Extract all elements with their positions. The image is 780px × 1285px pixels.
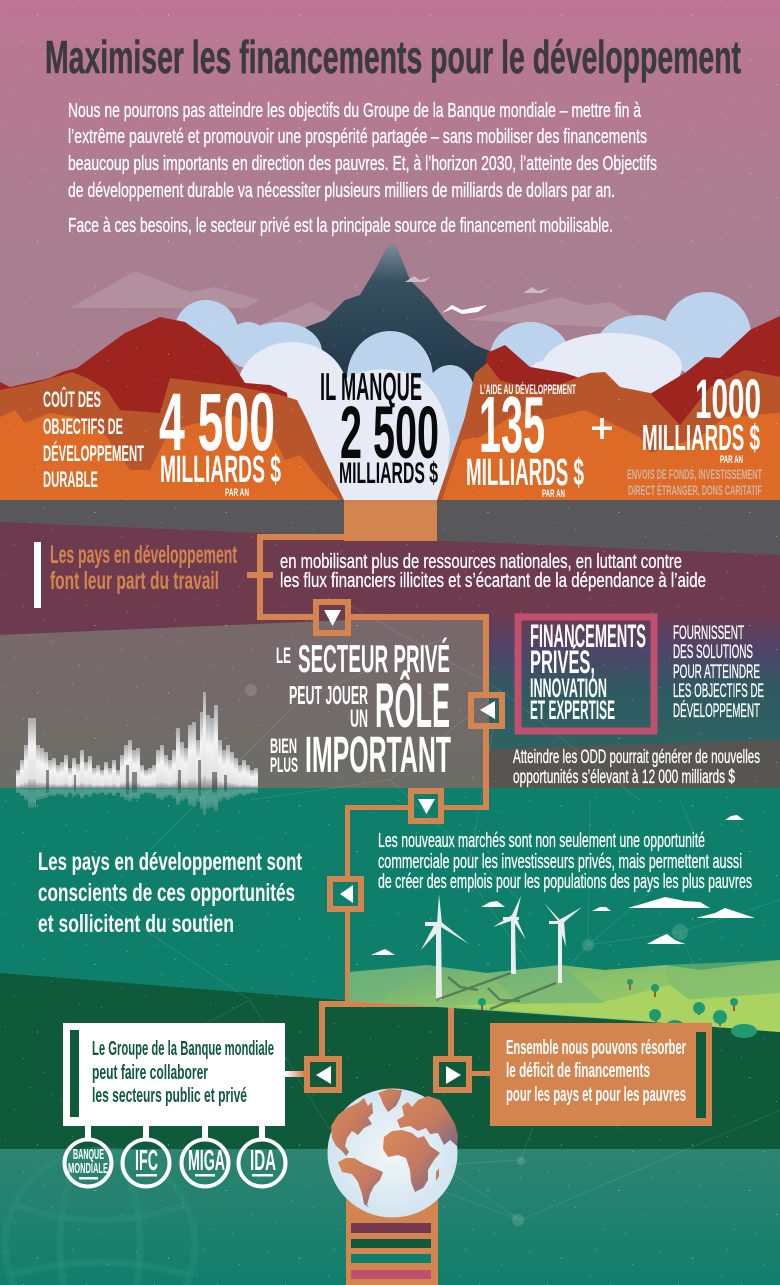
private sector headline: PLUS	[270, 754, 298, 777]
badge: Banque mondiale: BANQUE	[73, 1146, 104, 1163]
world bank logo watermark	[5, 1150, 195, 1285]
dark central peak	[306, 243, 492, 420]
flow connector lines	[247, 500, 490, 1076]
stat: cost of SDGs: PAR AN	[225, 487, 249, 499]
badge rings	[64, 1140, 286, 1186]
wind turbines	[421, 894, 582, 1000]
badge: IDA	[250, 1145, 276, 1177]
private sector headline: BIEN	[270, 735, 297, 758]
badge: Banque mondiale: MONDIALE	[68, 1160, 108, 1177]
arrow: down 1	[316, 602, 348, 633]
pink box: private finance: INNOVATION	[530, 673, 607, 703]
text: IMPORTANT	[305, 726, 451, 783]
developing countries aware statement: Les pays en développement sont	[38, 848, 302, 876]
stat: development aid	[466, 380, 584, 500]
mid orange mountains	[0, 363, 780, 500]
intro text	[68, 100, 657, 237]
stat: development aid: L’AIDE AU DÉVELOPPEMENT	[480, 381, 576, 397]
pink box: private finance	[518, 617, 654, 731]
developing countries aware statement: conscients de ces opportunités	[38, 879, 295, 907]
developing countries aware statement: et sollicitent du soutien	[38, 910, 234, 938]
white box: World Bank Group: peut faire collaborer	[92, 1062, 208, 1084]
white box: World Bank Group: les secteurs public et privé	[92, 1085, 247, 1107]
badge: IFC	[135, 1145, 158, 1177]
trees	[478, 979, 757, 1038]
mountain landscape	[0, 243, 780, 500]
stat: development aid: 135	[479, 380, 545, 469]
stat: cost of SDGs: DÉVELOPPEMENT	[43, 441, 144, 466]
background: pink sky	[0, 0, 780, 502]
wind farm landscape	[349, 815, 780, 1038]
network nodes	[245, 684, 688, 1226]
solutions text	[673, 623, 764, 722]
background: dark green section	[0, 973, 780, 1150]
stat: other flows	[627, 367, 762, 498]
developing countries aware statement	[38, 848, 302, 938]
text: SECTEUR PRIVÉ	[298, 637, 450, 681]
pink box: private finance: PRIVÉS,	[530, 644, 595, 680]
opportunities text	[513, 747, 760, 788]
domestic resources text	[280, 551, 706, 592]
birds	[405, 276, 549, 314]
city skyline	[16, 692, 258, 788]
badge: Banque mondiale	[68, 1146, 108, 1180]
institution badges	[64, 1126, 286, 1186]
background: gray panel	[0, 614, 490, 788]
text: RÔLE	[375, 670, 450, 741]
stat: cost of SDGs: OBJECTIFS DE	[43, 414, 123, 439]
stem under globe	[346, 1195, 438, 1285]
orange box: together: le déficit de financements	[506, 1060, 650, 1082]
plus sign	[592, 418, 612, 439]
pale clouds	[237, 333, 682, 500]
stat: cost of SDGs	[43, 377, 281, 499]
white box: World Bank Group: Le Groupe de la Banque mondiale	[92, 1038, 274, 1060]
arrow: right 6	[436, 1059, 469, 1090]
institution badges: MIGA	[188, 1145, 225, 1177]
stat: other flows: PAR AN	[720, 454, 743, 466]
hill facets	[349, 960, 780, 1032]
developing countries statement	[34, 541, 237, 608]
stat: development aid: PAR AN	[542, 488, 565, 500]
connector white box to arrow	[285, 1071, 304, 1077]
developing countries statement: font leur part du travail	[50, 567, 219, 595]
badge: MIGA	[188, 1145, 225, 1177]
private sector headline: PEUT JOUER	[289, 680, 368, 710]
text: MILLIARDS $	[466, 452, 584, 494]
private sector headline: UN	[350, 705, 368, 733]
stat: cost of SDGs: DURABLE	[43, 467, 98, 492]
globe	[328, 1088, 458, 1218]
network lines background	[60, 600, 780, 1220]
stat: cost of SDGs: MILLIARDS $	[160, 449, 281, 491]
stat: the gap: MILLIARDS $	[339, 457, 438, 490]
new markets text	[378, 830, 752, 893]
private sector headline	[270, 637, 451, 783]
badge: IDA: IDA	[250, 1145, 276, 1177]
stat: the gap: 2 500	[340, 391, 439, 474]
arrow: left 4	[330, 879, 361, 909]
background: gray band	[0, 500, 780, 570]
developing countries statement: Les pays en développement	[50, 541, 237, 569]
dark red mountains	[0, 316, 780, 500]
stat: cost of SDGs: COÛT DES	[43, 387, 101, 412]
background: maroon band	[0, 522, 780, 640]
turbine shadows	[436, 973, 556, 1009]
far pale mountains	[70, 271, 660, 330]
background: teal section	[0, 788, 780, 1048]
arrow: down 3	[411, 791, 441, 821]
stat: cost of SDGs: 4 500	[159, 377, 275, 468]
background: gradient panel right	[489, 612, 780, 788]
stat: the gap: IL MANQUE	[320, 366, 422, 409]
arrow: left 2	[471, 695, 502, 726]
green hills	[349, 960, 780, 1032]
private sector headline: LE	[276, 643, 291, 668]
text: FINANCEMENTS	[530, 618, 646, 654]
arrow: left 5	[307, 1059, 339, 1090]
background: lower teal section	[0, 1149, 780, 1285]
clouds	[371, 815, 755, 955]
blue clouds	[174, 292, 751, 500]
orange box: together	[490, 1023, 712, 1126]
stat: the gap	[320, 366, 439, 490]
pink box: private finance: ET EXPERTISE	[530, 695, 615, 725]
white box: World Bank Group	[63, 1023, 285, 1126]
institution badges: IFC	[135, 1145, 158, 1177]
skyline reflection	[16, 788, 258, 815]
background: dark gray band right	[489, 740, 780, 788]
front orange hills	[0, 410, 780, 500]
badge stems	[85, 1126, 265, 1139]
